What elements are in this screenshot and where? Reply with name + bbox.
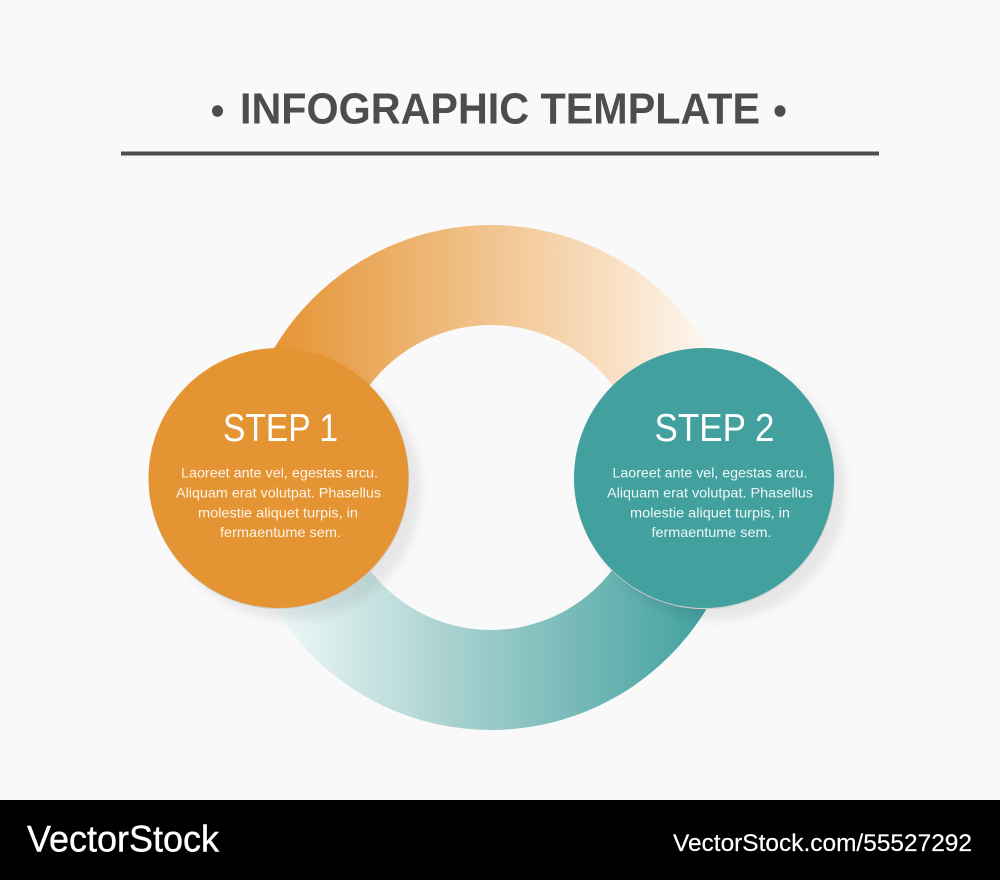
top arc: orange gradient	[238, 225, 744, 478]
step 1 heading: STEP 1	[223, 407, 338, 450]
panel: step 2 circle	[574, 348, 846, 620]
footer image id: VectorStock.com/55527292	[673, 830, 972, 857]
footer bar	[0, 800, 1000, 880]
step 2 heading: STEP 2	[654, 407, 774, 450]
footer logo text: VectorStock	[27, 818, 219, 860]
title: INFOGRAPHIC TEMPLATE	[240, 86, 760, 134]
panel: step 1 circle	[148, 348, 421, 620]
step 2 body text: Laoreet ante vel, egestas arcu.	[612, 465, 808, 481]
step 1 body text: fermaentume sem.	[220, 524, 341, 540]
step 1 body text: Aliquam erat volutpat. Phasellus	[176, 484, 381, 500]
step 2 body text: molestie aliquet turpis, in	[630, 504, 790, 520]
step 1 body text: Laoreet ante vel, egestas arcu.	[181, 465, 378, 481]
step 1 body text	[176, 465, 381, 540]
step 2 body text	[607, 465, 813, 540]
step 2 body text: Aliquam erat volutpat. Phasellus	[607, 484, 813, 500]
title underline	[121, 152, 879, 156]
step 1 body text: molestie aliquet turpis, in	[198, 504, 358, 520]
step 2 body text: fermaentume sem.	[652, 524, 772, 540]
bottom arc: teal gradient	[238, 478, 744, 730]
